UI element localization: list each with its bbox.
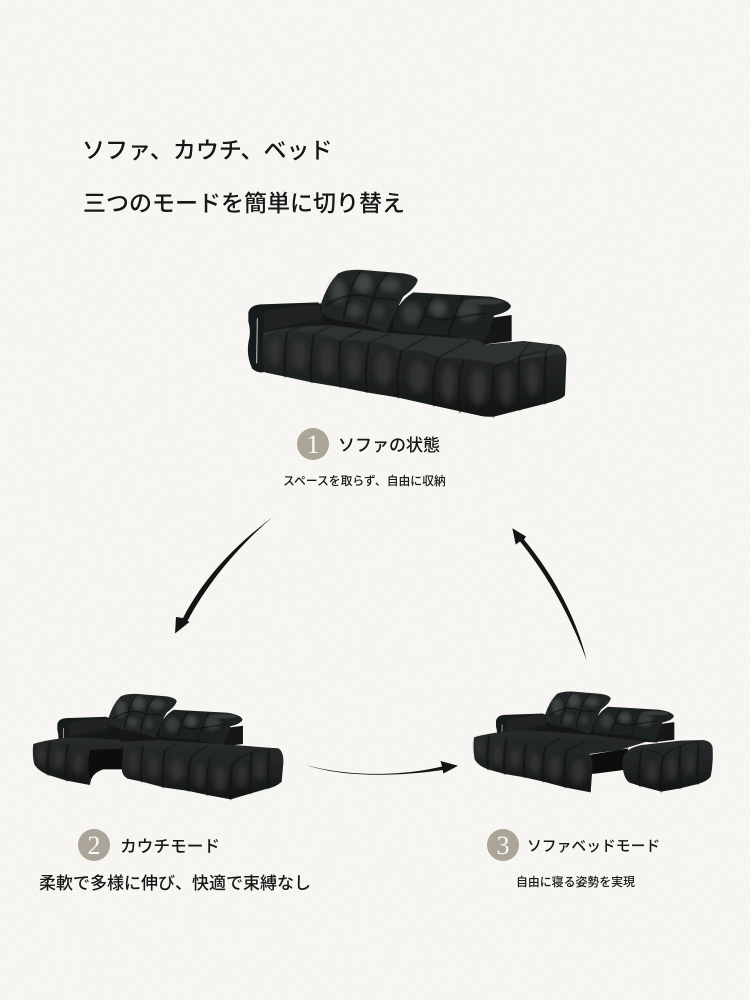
- step 3 label: [487, 829, 660, 889]
- sofa photo: sofa mode: [248, 270, 566, 417]
- step 2 label: 柔軟で多様に伸び、快適で束縛なし: [39, 874, 311, 893]
- step 2 label: 2: [88, 831, 100, 860]
- step 1 label: 1: [306, 430, 320, 459]
- step 2 label: [39, 829, 311, 893]
- step 3 label: 自由に寝る姿勢を実現: [516, 875, 635, 889]
- step 1 label: スペースを取らず、自由に収納: [283, 474, 446, 488]
- step 3 label: 3: [496, 831, 510, 860]
- arrow: sofa to couch: [175, 518, 272, 634]
- arrow: sofa bed to sofa: [512, 528, 586, 660]
- title: ソファ、カウチ、ベッド: [82, 137, 332, 163]
- title: [82, 137, 405, 216]
- step 1 label: [283, 428, 446, 488]
- title: 三つのモードを簡単に切り替え: [83, 190, 405, 216]
- sofa photo: couch mode: [33, 694, 283, 799]
- step 3 label: ソファベッドモード: [527, 839, 660, 855]
- sofa photo: sofa bed mode: [473, 692, 713, 792]
- arrow: couch to sofa bed: [306, 761, 458, 775]
- step 2 label: カウチモード: [120, 837, 220, 856]
- step 1 label: ソファの状態: [338, 436, 440, 455]
